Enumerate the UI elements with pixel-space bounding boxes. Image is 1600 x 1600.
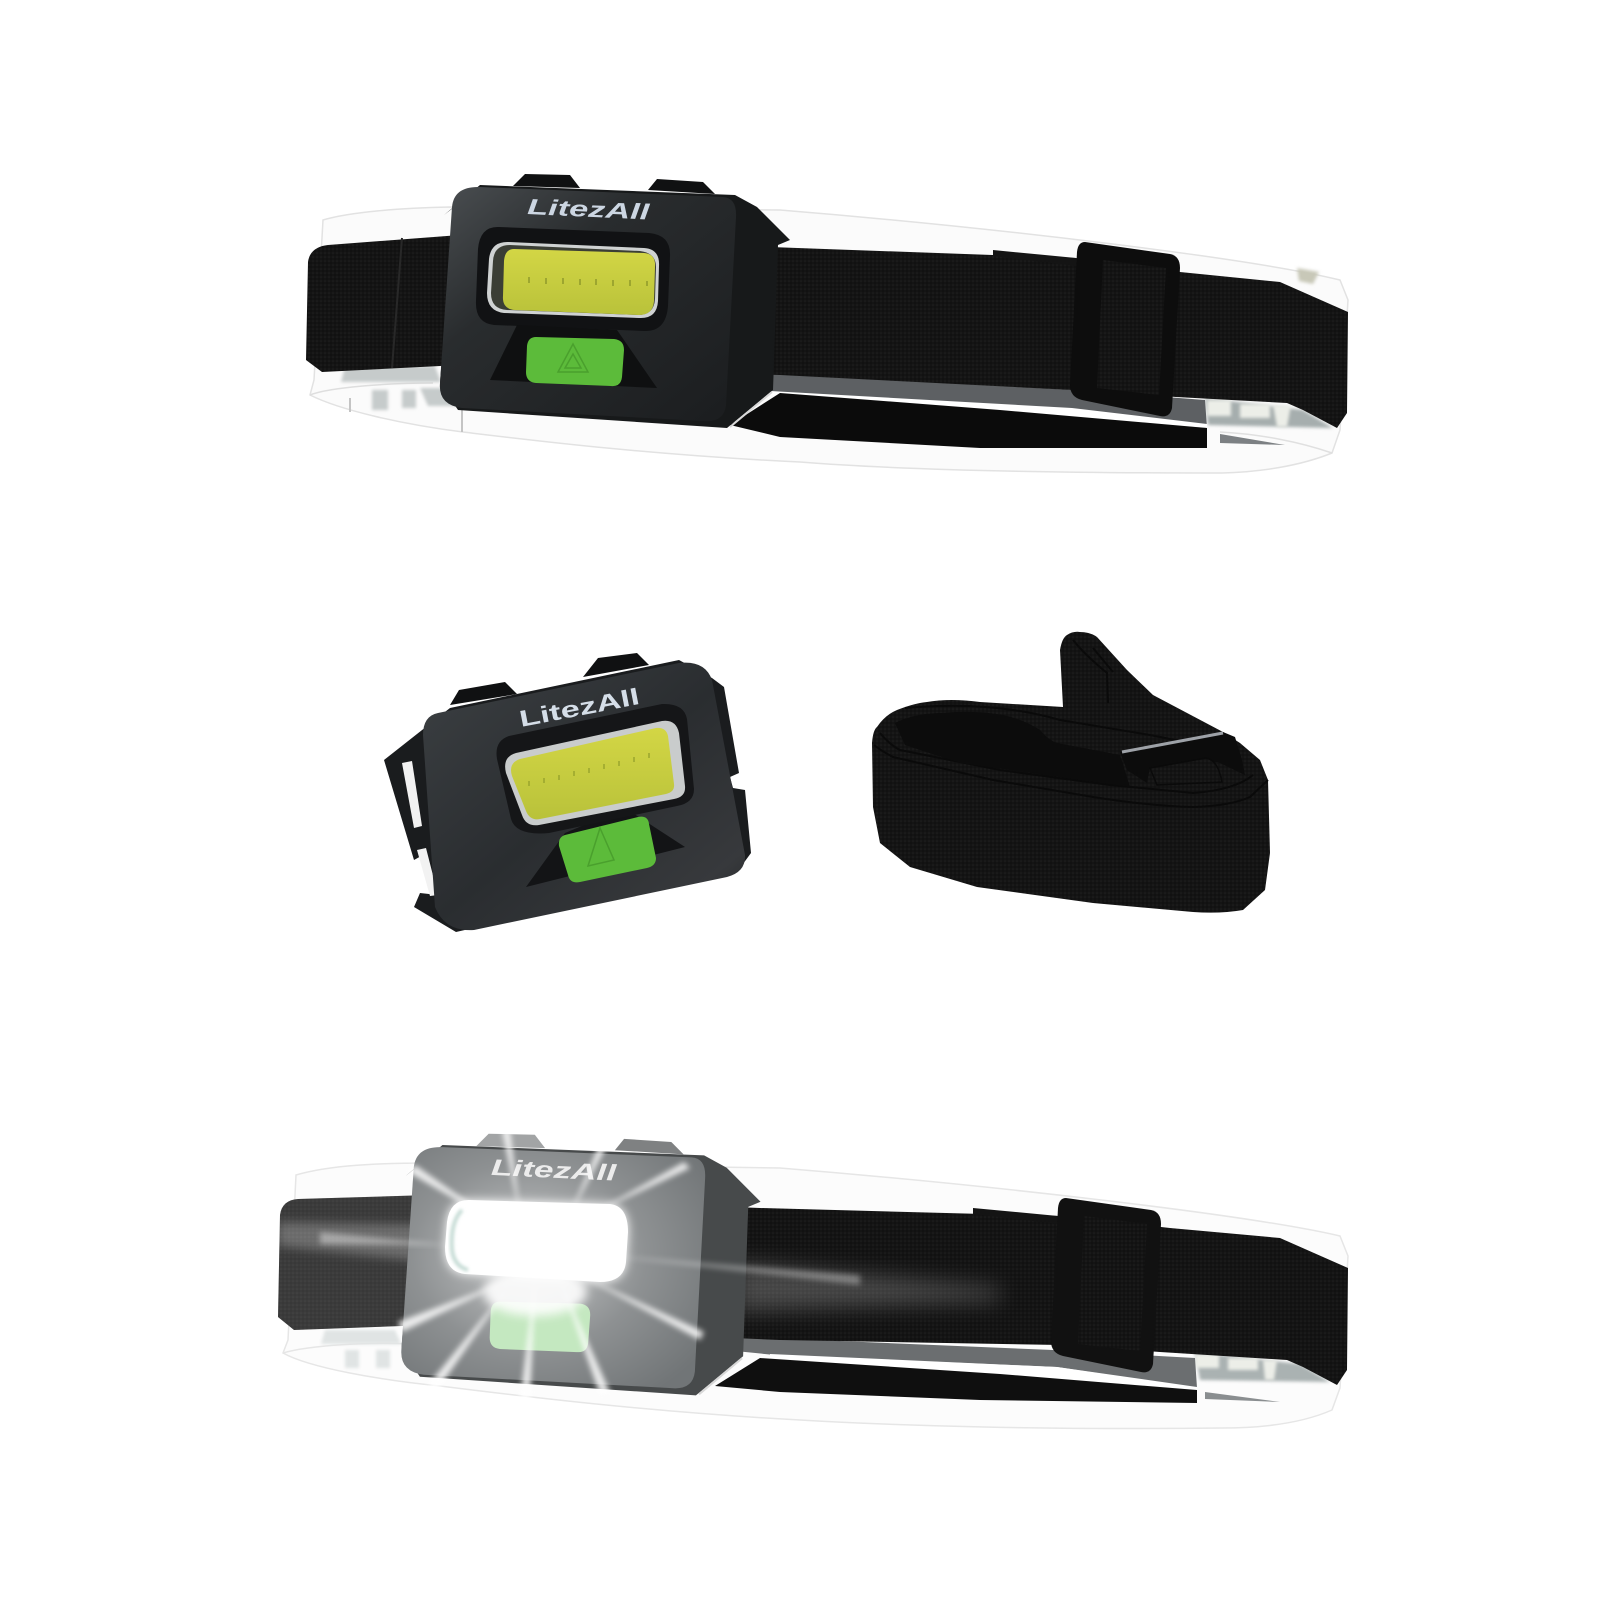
side wings xyxy=(440,185,790,428)
left clip xyxy=(450,682,517,705)
LED lens rim xyxy=(505,721,685,825)
lit lens core xyxy=(445,1200,628,1282)
right clip xyxy=(583,653,649,677)
front face xyxy=(440,187,736,421)
LED recess xyxy=(476,227,670,331)
middle: detached headlamp unit xyxy=(384,653,751,932)
headlamp on clear stand: lit xyxy=(278,1130,1348,1429)
LED yellow panel xyxy=(511,728,674,819)
light rays xyxy=(398,1130,704,1400)
brand logo: LitezAll xyxy=(517,683,642,732)
strap buckle xyxy=(1070,242,1180,416)
rolled elastic strap xyxy=(872,632,1270,913)
lens edge tint xyxy=(452,1210,468,1270)
lower right silver edge xyxy=(699,1358,742,1394)
right strap light streak xyxy=(735,1262,1000,1312)
button logo xyxy=(558,344,588,372)
inner cavity xyxy=(895,712,1130,787)
top clips xyxy=(513,174,580,188)
headlamp body xyxy=(401,1134,761,1395)
right top clip xyxy=(648,179,715,194)
lower right silver edge xyxy=(730,392,772,427)
power button washed out xyxy=(490,1302,590,1352)
LED ticks xyxy=(529,753,649,786)
right top clip xyxy=(615,1139,684,1154)
top clips xyxy=(476,1134,545,1148)
mount frame xyxy=(384,660,751,932)
LED assembly xyxy=(496,704,694,833)
clear acrylic stand xyxy=(310,207,1348,473)
elastic strap xyxy=(306,235,1348,428)
side wings xyxy=(401,1145,761,1395)
power button xyxy=(559,817,656,882)
brand logo: LitezAll xyxy=(490,1155,618,1186)
strap buckle xyxy=(1051,1198,1161,1372)
button recess xyxy=(490,325,657,388)
lower flare xyxy=(483,1268,587,1316)
strap silhouette xyxy=(872,632,1270,913)
LED lens rim xyxy=(487,242,659,318)
face glow xyxy=(401,1147,705,1388)
strap slot xyxy=(402,761,438,896)
front band top edge xyxy=(874,745,1268,807)
button logo xyxy=(588,828,614,866)
strap rolled in buckle xyxy=(1150,758,1222,785)
elastic strap xyxy=(278,1195,1348,1385)
long left ray xyxy=(320,1232,450,1245)
clear acrylic stand xyxy=(283,1163,1348,1429)
lens inner shadow xyxy=(491,245,656,315)
power button xyxy=(526,337,624,386)
second wrap edge xyxy=(880,733,1253,793)
brand logo: LitezAll xyxy=(527,194,651,225)
buckle highlight xyxy=(1122,733,1223,752)
headlamp body xyxy=(440,174,790,428)
front face xyxy=(401,1147,705,1388)
LED yellow panel xyxy=(503,249,655,315)
left strap streak xyxy=(278,1222,430,1262)
lit lens halo xyxy=(445,1200,628,1282)
LED ticks xyxy=(529,277,647,286)
reflection band under strap xyxy=(715,1336,1197,1403)
slider buckle xyxy=(1120,732,1245,783)
long right ray xyxy=(600,1255,860,1285)
button recess xyxy=(526,808,685,887)
unit face xyxy=(423,663,745,930)
tail fold xyxy=(1073,640,1113,703)
reflection band under strap xyxy=(730,372,1207,448)
LED assembly xyxy=(476,227,670,331)
back wrap edges xyxy=(905,706,1200,745)
headlamp on clear stand: off xyxy=(306,174,1348,473)
LED recess xyxy=(496,704,694,833)
left strap haze xyxy=(278,1195,430,1330)
